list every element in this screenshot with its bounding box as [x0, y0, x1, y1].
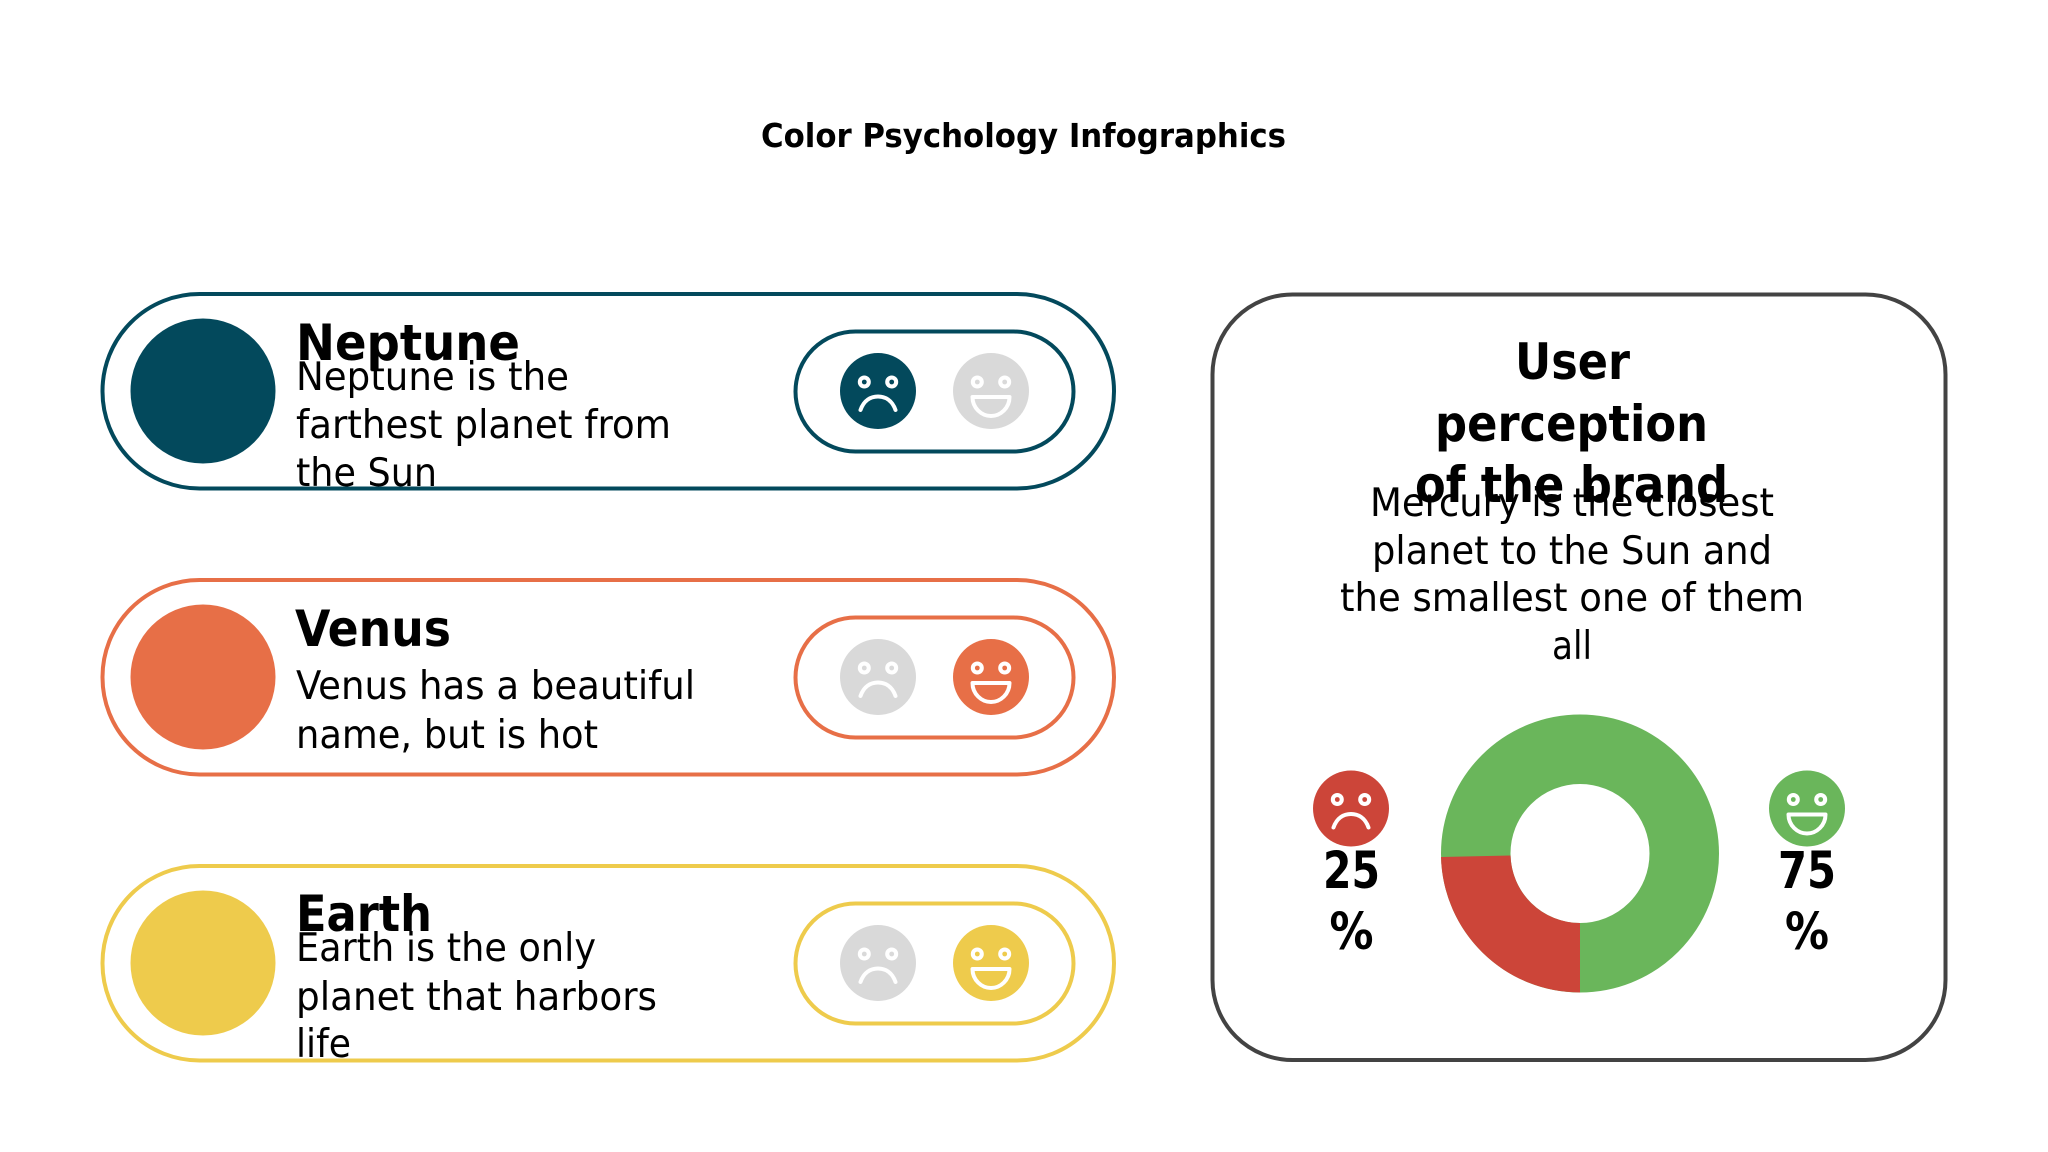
- heading: Venus: Venus: [295, 600, 451, 658]
- description: Mercury: the smallest one of them: [1340, 576, 1804, 621]
- heading: Neptune: Neptune: [296, 314, 520, 372]
- label: 25 percent: %: [1330, 903, 1374, 962]
- description: Earth: life: [296, 1022, 351, 1067]
- heading: user perception: [1415, 333, 1728, 514]
- donut chart: [1441, 749, 1684, 992]
- label: 25 percent: [1323, 842, 1380, 962]
- segment: positive 75%: [1476, 749, 1684, 958]
- panel: Venus: [102, 580, 1114, 774]
- description: Neptune: Neptune is the: [296, 355, 569, 400]
- icon: sad face red: [1313, 770, 1389, 846]
- rating toggle: Venus: [796, 618, 1074, 738]
- panel: Neptune: [102, 294, 1114, 496]
- description: Neptune: farthest planet from: [296, 403, 671, 448]
- label: 75 percent: 75: [1778, 842, 1836, 901]
- heading: user perception: perception: [1435, 395, 1708, 453]
- label: 75 percent: %: [1785, 903, 1829, 962]
- description: Earth: planet that harbors: [296, 975, 657, 1020]
- heading: Earth: Earth: [296, 885, 432, 943]
- panel: Earth: [102, 866, 1114, 1067]
- icon: sad face active: [840, 353, 916, 429]
- description: Mercury: Mercury is the closest: [1370, 481, 1774, 526]
- icon: happy face inactive: [953, 353, 1029, 429]
- icon: sad face inactive: [840, 639, 916, 715]
- label: 25 percent: 25: [1323, 842, 1380, 901]
- rating toggle: Earth: [796, 904, 1074, 1024]
- rating toggle: Neptune: [796, 332, 1074, 452]
- heading: user perception: User: [1515, 333, 1631, 391]
- icon: happy face green: [1769, 770, 1845, 846]
- panel: user perception: [1212, 294, 1946, 1060]
- label: 75 percent: [1778, 842, 1836, 962]
- description: Mercury: [1340, 481, 1804, 669]
- description: Mercury: all: [1552, 624, 1592, 669]
- color swatch: Venus: [130, 604, 276, 750]
- color swatch: Earth: [130, 890, 276, 1036]
- heading: user perception: of the brand: [1415, 456, 1728, 514]
- description: Earth: Earth is the only: [296, 926, 596, 971]
- title: Color Psychology Infographics: [761, 116, 1286, 155]
- description: Venus: Venus has a beautiful: [296, 664, 695, 709]
- description: Mercury: planet to the Sun and: [1372, 529, 1772, 574]
- description: Neptune: [296, 355, 671, 496]
- icon: happy face active: [953, 925, 1029, 1001]
- description: Venus: [296, 664, 695, 758]
- icon: sad face inactive: [840, 925, 916, 1001]
- description: Earth: [296, 926, 657, 1067]
- description: Neptune: the Sun: [296, 451, 437, 496]
- description: Venus: name, but is hot: [296, 713, 598, 758]
- segment: negative 25%: [1441, 856, 1580, 992]
- color swatch: Neptune: [130, 318, 276, 464]
- icon: happy face active: [953, 639, 1029, 715]
